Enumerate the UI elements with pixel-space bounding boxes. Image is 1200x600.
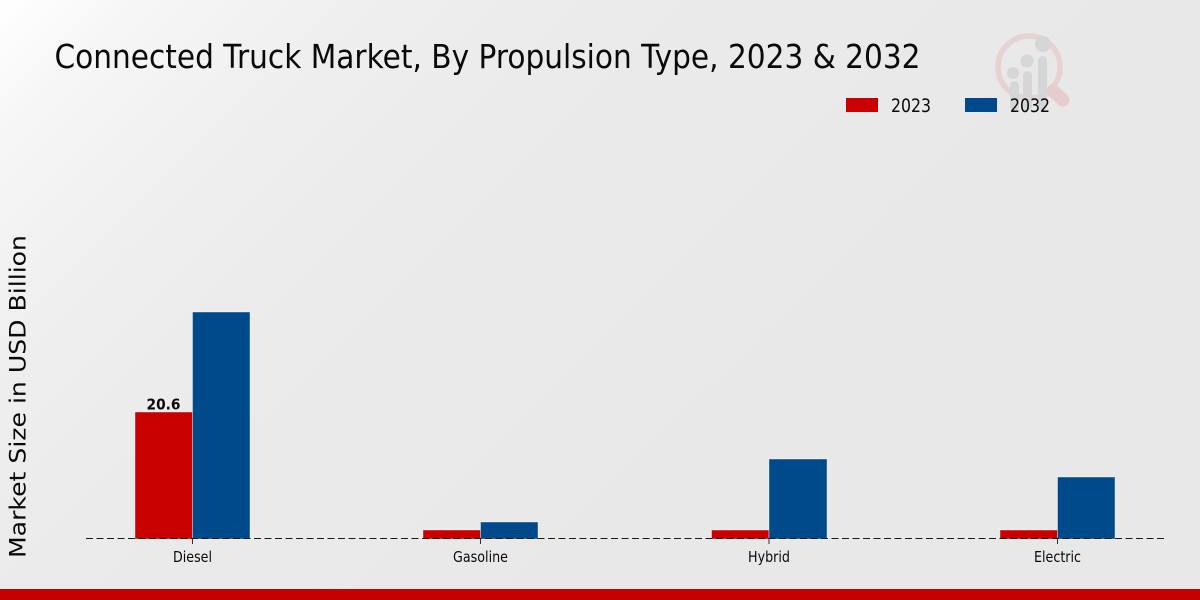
bar chart (86, 312, 1164, 566)
category labels (173, 548, 1081, 566)
legend (846, 95, 1050, 117)
category labels: Electric (1034, 548, 1081, 566)
bars: Gasoline (423, 522, 538, 539)
legend: 2032 (965, 95, 1050, 117)
bars: Diesel (135, 312, 250, 539)
category labels: Hybrid (748, 548, 790, 566)
legend: 2032: 2032 (1010, 95, 1050, 117)
y axis title: Market Size in USD Billion (6, 235, 32, 558)
title: Connected Truck Market, By Propulsion Type, 2023 & 2032 (54, 37, 920, 76)
icon: watermark logo (998, 36, 1063, 111)
category labels: Diesel (173, 548, 212, 566)
legend: 2023: 2023 (891, 95, 931, 117)
bars: Electric (1000, 477, 1115, 539)
category labels: Gasoline (453, 548, 508, 566)
legend: 2023 (846, 95, 931, 117)
bars: Hybrid (712, 459, 827, 539)
value label: 20.6 (146, 396, 180, 414)
footer bar (0, 589, 1200, 600)
